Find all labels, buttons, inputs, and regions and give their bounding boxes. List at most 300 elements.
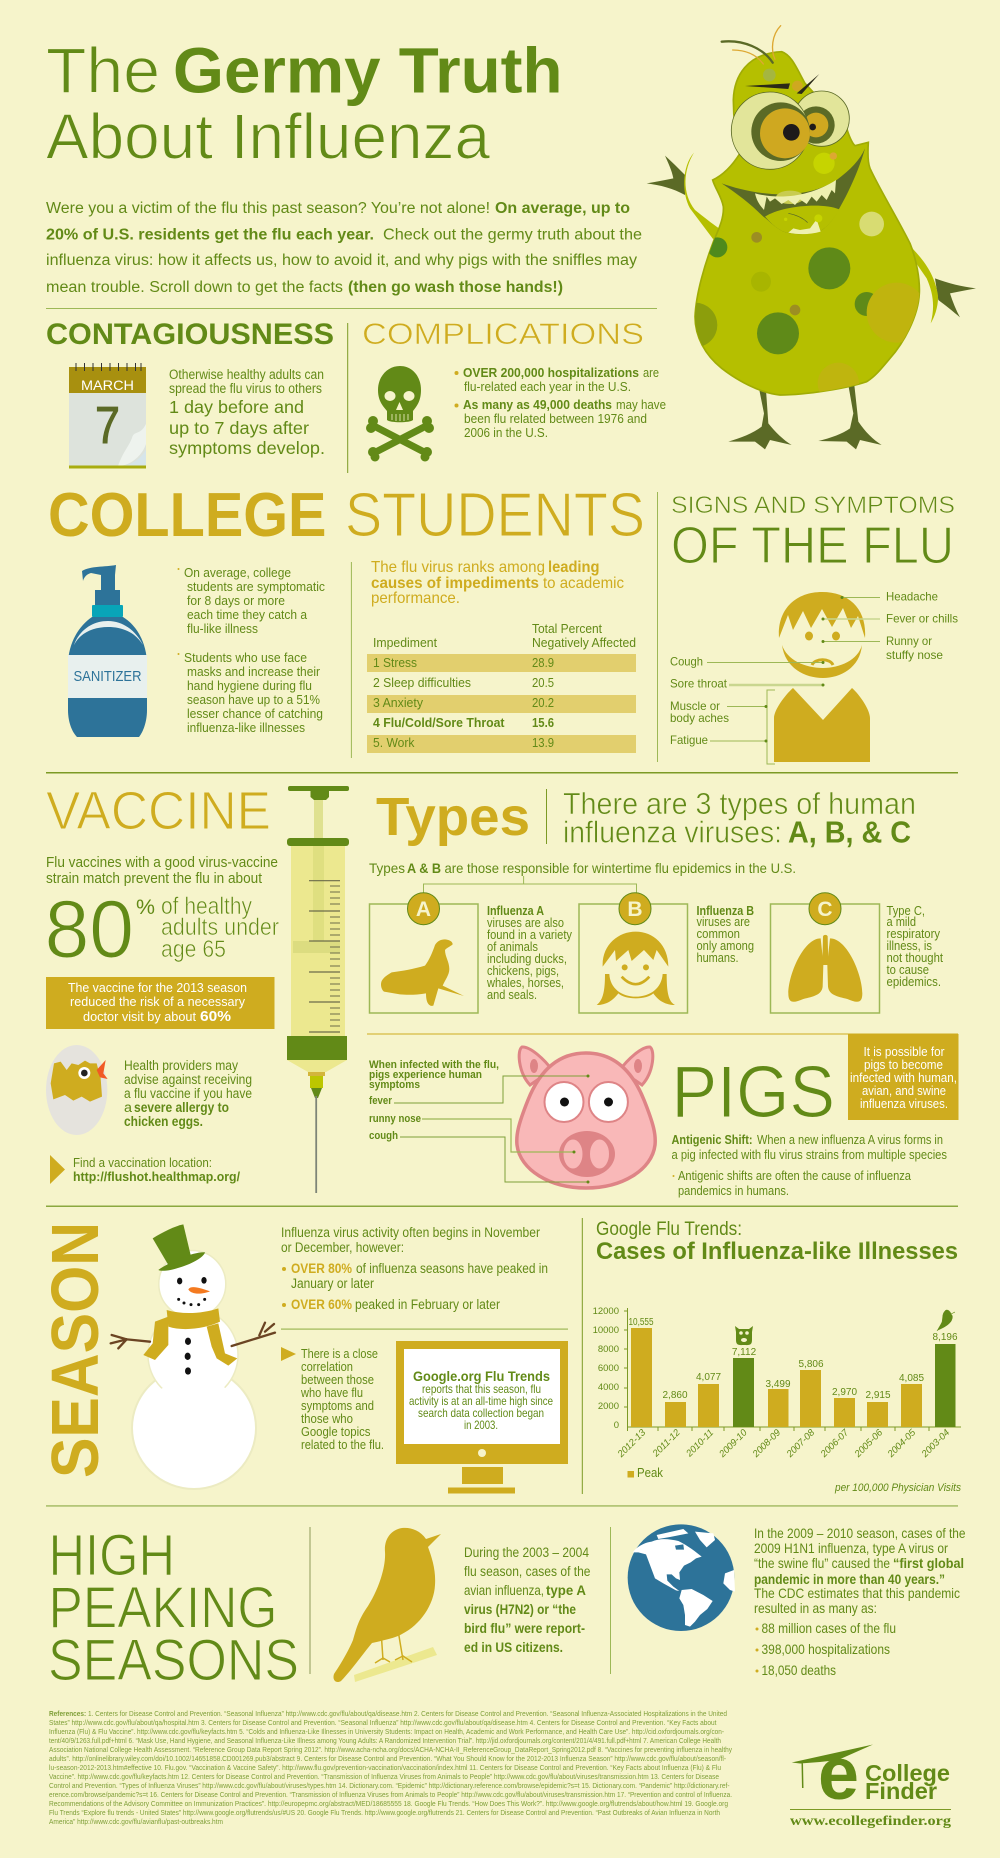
heading: three types of influenza: A, B, & C — [788, 815, 911, 850]
symptom labels: body aches — [670, 711, 729, 725]
text: leading causes of impediments: The flu virus ranks among — [371, 559, 545, 576]
references — [49, 1711, 732, 1826]
text: influenza season timing: January or later — [291, 1276, 374, 1291]
x axis labels: 2005-06 — [852, 1427, 886, 1460]
callout: pigs infection: It is possible for — [864, 1044, 945, 1059]
heading: complications: COMPLICATIONS — [362, 318, 644, 351]
badge c — [809, 893, 841, 925]
y axis labels: 2000 — [598, 1401, 619, 1412]
text: contagious period: Otherwise healthy adults can — [169, 367, 324, 382]
snowman scarf — [143, 1308, 237, 1366]
heading: three types of influenza — [563, 786, 916, 850]
text: egg allergy: a — [124, 1100, 133, 1115]
references: Recommendations of the Advisory Committee on Immunization Practices”. http://europepmc.org/abstract/MED/18685555 18. Google Flu Trends. “How Does This Work?”. http://www.google.org/flutrends/about/how.html 19. Google.org — [49, 1801, 728, 1808]
text: swine flu pandemic: 398,000 hospitalizations — [762, 1641, 890, 1657]
text: antigenic shift: a pig infected with flu virus strains from multiple species — [672, 1147, 947, 1162]
text: antigenic shift: When a new influenza A virus forms in — [757, 1132, 943, 1147]
text: college student facts: for 8 days or more — [187, 593, 285, 608]
table row highlights — [367, 654, 636, 753]
y axis labels: 12000 — [593, 1306, 619, 1317]
bar values: 3,499 — [765, 1379, 791, 1390]
bar values: 2,970 — [832, 1387, 857, 1398]
text: egg allergy: Health providers may — [124, 1058, 238, 1073]
badge b — [619, 893, 651, 925]
text: complications facts: been flu related between 1976 and — [464, 411, 647, 426]
snowman face — [177, 1277, 210, 1306]
text: influenza a: Influenza A — [487, 904, 544, 918]
text: types a and b: Types — [369, 860, 405, 876]
heading: signs and symptoms: SIGNS AND SYMPTOMS — [671, 492, 955, 519]
text: influenza a: found in a variety — [487, 928, 573, 942]
person body — [774, 688, 870, 762]
title: Germy Truth — [173, 35, 562, 107]
text: influenza a: of animals — [487, 940, 538, 954]
text: type c: respiratory — [886, 927, 941, 941]
heading: college students: COLLEGE — [48, 481, 326, 550]
text: type c: epidemics. — [886, 975, 941, 989]
monster spots — [695, 68, 920, 392]
text: complications facts: may have — [616, 397, 666, 412]
x axis labels: 2007-08 — [784, 1427, 818, 1460]
table: impediments: Total Percent — [532, 621, 602, 636]
text: college student facts: each time they catch a — [187, 607, 308, 622]
monster hair — [722, 26, 781, 64]
text: leading causes of impediments: leading — [548, 559, 600, 576]
text: swine flu pandemic: 88 million cases of the flu — [762, 1620, 896, 1636]
bar values: 7,112 — [732, 1347, 757, 1358]
heading: signs and symptoms — [671, 492, 955, 575]
heading: google flu trends: Google Flu Trends: — [596, 1219, 742, 1240]
text: bird flu season — [464, 1545, 590, 1655]
text: type c: to cause — [886, 963, 929, 977]
table: impediments: Impediment — [373, 635, 437, 650]
heading: google flu trends: Cases of Influenza-like Illnesses — [596, 1238, 958, 1265]
person hair — [779, 592, 865, 638]
icon: computer monitor with flu trends: search data collection began — [418, 1406, 544, 1420]
text: vaccine effectiveness: Flu vaccines with a good virus-vaccine — [46, 854, 278, 871]
pig symptoms labels — [369, 1059, 590, 1184]
x axis labels: 2012-13 — [615, 1427, 649, 1460]
monster legs — [728, 385, 882, 449]
text: antigenic shift: Antigenic Shift: — [672, 1132, 752, 1147]
callout: vaccine 60%: doctor visit by about — [83, 1009, 196, 1024]
title — [46, 35, 562, 173]
arrow and correlation text: those who — [301, 1411, 353, 1426]
bar chart: cases per season — [593, 1306, 961, 1494]
text: influenza a: whales, horses, — [486, 976, 564, 990]
text: bird flu season: flu season, cases of the — [464, 1564, 590, 1579]
bar values: 10,555 — [628, 1317, 654, 1328]
text: type c: a mild — [886, 915, 916, 929]
logo e letter: e — [818, 1732, 859, 1815]
text: college student facts: On average, college — [184, 565, 291, 580]
arrow and correlation text — [281, 1346, 384, 1452]
text: college student facts: lesser chance of catching — [187, 706, 323, 721]
table: impediments: 4 Flu/Cold/Sore Throat — [373, 715, 505, 730]
references: America” http://www.cdc.gov/flu/avianflu/past-outbreaks.htm — [49, 1819, 223, 1826]
heading: high peaking seasons — [48, 1523, 299, 1693]
table: impediments: Negatively Affected — [532, 635, 636, 650]
monster body — [695, 52, 919, 395]
text: vaccine effectiveness — [45, 854, 279, 975]
text: contagious period: 1 day before and — [169, 397, 304, 417]
icon: computer monitor with flu trends: activity is at an all-time high since — [409, 1394, 553, 1408]
title: The — [46, 35, 160, 107]
text: vaccine effectiveness: of healthy — [161, 893, 252, 920]
text: type c: Type C, — [886, 904, 925, 918]
text: vaccine effectiveness: % — [136, 896, 155, 919]
text: leading causes of impediments: causes of impediments — [371, 575, 539, 592]
references: Vaccine”. http://www.cdc.gov/flu/keyfacts.htm 12. Centers for Disease Control and Prevention. “Transmission of Influenza Viruses from Animals to People” http://www.cdc.gov/flu/about/viruses/transmission.htm 13. Centers for Disease — [49, 1774, 719, 1781]
symptom labels: Runny or — [886, 634, 932, 648]
text: types a and b: are those responsible for wintertime flu epidemics in the U.S. — [444, 860, 796, 876]
text: vaccine effectiveness: strain match prevent the flu in about — [46, 870, 263, 887]
x axis labels: 2009-10 — [716, 1427, 750, 1460]
text: egg allergy: advise against receiving — [124, 1072, 252, 1087]
references: erence.com/browse/pandemic?s=t 16. Centers for Disease Control and Prevention. “Transmission of Influenza Viruses from Animals to People” http://www.cdc.gov/flu/about/viruses/transmission.htm 17. “Prevention and control of Influenza. — [49, 1792, 732, 1799]
callout: vaccine 60%: The vaccine for the 2013 season — [68, 980, 247, 995]
pig symptoms labels: fever — [369, 1095, 393, 1107]
icon: calendar march 7: MARCH — [81, 377, 134, 393]
x axis labels: 2008-09 — [750, 1427, 784, 1460]
monster left arm and hand — [647, 153, 719, 239]
monster right eye — [794, 91, 849, 146]
text: influenza season timing: OVER 60% — [291, 1297, 352, 1312]
y axis labels: 4000 — [598, 1382, 619, 1393]
text: contagious period: up to 7 days after — [169, 418, 309, 438]
callout: pigs infection — [848, 1034, 958, 1120]
icon: pig face — [517, 1047, 655, 1188]
table: impediments: 20.5 — [532, 675, 554, 690]
text: influenza b: common — [696, 927, 740, 941]
references: References: 1. Centers for Disease Control and Prevention. “Seasonal Influenza” http://www.cdc.gov/flu/about/qa/disease.htm 2. Centers for Disease Control and Prevention. “Seasonal Influenza-Associated Hospitalizations in the United — [49, 1711, 727, 1718]
pig symptoms labels: When infected with the flu, — [369, 1059, 499, 1071]
text: contagious period: symptoms develop. — [169, 438, 325, 458]
text: bird flu season: ed in US citizens. — [464, 1640, 563, 1655]
text: influenza season timing: of influenza seasons have peaked in — [356, 1261, 548, 1276]
intro paragraph: Were you a victim of the flu this past season? You’re not alone! — [46, 200, 490, 217]
icon: globe — [628, 1524, 735, 1631]
heading: contagiousness: CONTAGIOUSNESS — [46, 318, 334, 351]
text: complications facts: are — [643, 365, 659, 380]
badge c: C — [817, 898, 833, 921]
text: influenza season timing: Influenza virus activity often begins in November — [281, 1225, 540, 1240]
text: swine flu pandemic: resulted in as many as: — [754, 1600, 877, 1616]
text: egg allergy: severe allergy to — [134, 1100, 229, 1115]
arrow and correlation text: There is a close — [301, 1346, 378, 1361]
monster eyebrows — [745, 74, 819, 94]
text: antigenic shift: pandemics in humans. — [678, 1183, 789, 1198]
heading: season: SEASON — [38, 1222, 113, 1478]
arrow and correlation text: symptoms and — [301, 1398, 374, 1413]
logo: ecollege finder — [790, 1732, 951, 1828]
text: influenza b: Influenza B — [696, 904, 754, 918]
x axis labels: 2004-05 — [885, 1427, 919, 1460]
intro paragraph: influenza virus: how it affects us, how to avoid it, and why pigs with the sniffles may — [46, 252, 637, 269]
text: type c: illness, is — [886, 939, 932, 953]
text: influenza a: chickens, pigs, — [487, 964, 559, 978]
logo graduation cap — [792, 1744, 873, 1788]
bar values: 8,196 — [932, 1332, 958, 1343]
heading: high peaking seasons: PEAKING — [48, 1576, 278, 1640]
text: influenza b: only among — [696, 939, 754, 953]
bar values — [628, 1317, 958, 1401]
text: college student facts: flu-like illness — [187, 621, 258, 636]
text: college student facts — [178, 565, 325, 735]
pig symptoms labels: pigs experience human — [369, 1069, 482, 1081]
icon: computer monitor with flu trends: in 2003. — [464, 1418, 498, 1432]
icon: small pig on chart — [735, 1326, 753, 1345]
text: influenza season timing: OVER 80% — [291, 1261, 352, 1276]
intro paragraph: (then go wash those hands!) — [348, 279, 563, 296]
y axis labels: 10000 — [593, 1325, 619, 1336]
text: swine flu pandemic — [754, 1525, 966, 1678]
text: complications facts: As many as 49,000 deaths — [463, 397, 612, 412]
text: complications facts — [454, 365, 666, 440]
text: college student facts: students are symptomatic — [187, 579, 325, 594]
icon: sanitizer bottle: SANITIZER — [74, 668, 142, 685]
icon: computer monitor with flu trends: Google.org Flu Trends — [413, 1368, 550, 1384]
badge a: A — [416, 898, 431, 921]
badge a — [408, 893, 440, 925]
text: vaccine effectiveness: adults under — [161, 914, 279, 941]
intro paragraph: Check out the germy truth about the — [383, 226, 642, 244]
pig symptoms labels: symptoms — [369, 1079, 420, 1091]
table: impediments: 13.9 — [532, 735, 554, 750]
legend: peak: Peak — [637, 1466, 664, 1480]
bar values: 4,085 — [899, 1373, 924, 1384]
heading: high peaking seasons: HIGH — [48, 1523, 175, 1588]
arrow and correlation text: related to the flu. — [301, 1437, 384, 1452]
text: swine flu pandemic: 18,050 deaths — [762, 1662, 836, 1678]
text: vaccine effectiveness: 80 — [45, 884, 134, 975]
table: impediments — [367, 621, 636, 753]
bar values: 2,915 — [865, 1390, 891, 1401]
pig symptoms labels: runny nose — [369, 1113, 421, 1125]
arrow and correlation text: between those — [301, 1372, 374, 1387]
symptom labels: Fever or chills — [886, 612, 958, 626]
y axis labels: 6000 — [598, 1363, 619, 1374]
symptom labels — [670, 590, 958, 747]
text: bird flu season: avian influenza, — [464, 1583, 544, 1598]
text: bird flu season: type A — [546, 1583, 586, 1598]
icon: small bird on chart — [937, 1310, 955, 1331]
text: bird flu season: virus (H7N2) or “the — [464, 1602, 576, 1617]
text: contagious period: spread the flu virus to others — [169, 381, 322, 396]
monster illustration — [647, 26, 976, 449]
monster left eye — [731, 92, 810, 169]
symptom leader lines — [707, 596, 880, 764]
text: antigenic shift: Antigenic shifts are often the cause of influenza — [678, 1168, 912, 1183]
arrow and vaccination link: Find a vaccination location: — [73, 1155, 212, 1170]
arrow and vaccination link — [50, 1155, 240, 1184]
icon: calendar march 7 — [69, 363, 146, 468]
monster mouth — [722, 148, 865, 234]
references: Association National College Health Assessment. “Reference Group Data Report Spring 2012”. http://www.acha-ncha.org/docs/ACHA-NCHA-II_ReferenceGroup_DataReport_Spring2012.pdf 8. “Vaccines for preventing influenza in healthy — [49, 1747, 732, 1754]
references: Flu Trends “Explore flu trends - United States” http://www.google.org/flutrends/us/#US 20. Google Flu Trends. http://www.google.org/flutrends 21. Centers for Disease Control and Prevention. “Past Outbreaks of Avian Influenza in North — [49, 1810, 720, 1817]
text: college student facts: season have up to a 51% — [187, 692, 320, 707]
text: swine flu pandemic: “the swine flu” caused the — [754, 1555, 890, 1571]
callout: pigs infection: influenza viruses. — [860, 1096, 948, 1111]
text: influenza season timing: peaked in February or later — [355, 1297, 500, 1312]
snowman details — [111, 1224, 275, 1375]
arrow and correlation text: Google topics — [301, 1424, 371, 1439]
symptom labels: Cough — [670, 655, 703, 669]
text: influenza a: including ducks, — [487, 952, 567, 966]
text: types a and b: A & B — [407, 860, 441, 876]
logo url: www.ecollegefinder.org — [790, 1813, 951, 1828]
intro paragraph: mean trouble. Scroll down to get the facts — [46, 279, 343, 296]
heading: signs and symptoms: OF THE FLU — [671, 517, 954, 575]
x axis labels: 2011-12 — [650, 1427, 683, 1460]
snowman arms — [111, 1323, 275, 1348]
icon: sanitizer bottle — [68, 565, 147, 737]
x axis labels: 2006-07 — [818, 1427, 852, 1460]
title: About Influenza — [46, 101, 490, 173]
text: college student facts: Students who use face — [184, 650, 307, 665]
x axis labels: 2010-11 — [683, 1427, 716, 1460]
intro paragraph: 20% of U.S. residents get the flu each year. — [46, 226, 374, 244]
icon: computer monitor with flu trends: reports that this season, flu — [422, 1382, 541, 1396]
logo wordmark: College — [865, 1760, 950, 1786]
bars — [631, 1328, 956, 1427]
icon: skull and crossbones — [366, 366, 434, 462]
icon: snowman — [111, 1224, 275, 1489]
text: swine flu pandemic: pandemic in more than 40 years.” — [754, 1571, 945, 1587]
text: bird flu season: During the 2003 – 2004 — [464, 1545, 589, 1560]
icon: syringe — [287, 786, 349, 1193]
icon: computer monitor with flu trends — [396, 1341, 568, 1494]
arrow and vaccination link: http://flushot.healthmap.org/ — [73, 1169, 240, 1184]
arrow and correlation text: correlation — [301, 1359, 353, 1374]
logo wordmark: Finder — [865, 1778, 937, 1804]
text: type c: not thought — [886, 951, 943, 965]
text: antigenic shift — [672, 1132, 947, 1198]
symptom labels: Sore throat — [670, 677, 728, 691]
text: influenza a: viruses are also — [487, 916, 564, 930]
text: leading causes of impediments: performance. — [371, 590, 460, 607]
symptom labels: Muscle or — [670, 699, 720, 713]
icon: person with symptoms — [670, 590, 958, 764]
table: impediments: 2 Sleep difficulties — [373, 675, 471, 690]
text: influenza a — [486, 904, 573, 1002]
callout: vaccine 60%: reduced the risk of a necessary — [70, 994, 245, 1009]
text: bird flu season: bird flu” were report- — [464, 1621, 585, 1636]
table: impediments: 1 Stress — [373, 655, 417, 670]
callout: pigs infection: avian, and swine — [862, 1083, 946, 1098]
y axis labels — [593, 1306, 619, 1431]
references: adults”. http://onlinelibrary.wiley.com/doi/10.1002/14651858.CD001269.pub3/abstract 9. Centers for Disease Control and Prevention. “What You Should Know for the 2012-2013 Influenza Season” http://www.cdc.gov/flu/about/season/fl- — [49, 1756, 727, 1763]
heading: three types of influenza: influenza viruses: — [563, 815, 782, 850]
badge b: B — [627, 898, 643, 921]
snowman buttons — [185, 1338, 191, 1375]
callout: vaccine 60% — [46, 977, 274, 1029]
text: egg allergy — [124, 1058, 252, 1129]
bar values: 4,077 — [696, 1372, 721, 1383]
heading: google flu trends — [596, 1219, 958, 1265]
symptom labels: Headache — [886, 590, 938, 604]
icon: seal — [381, 939, 464, 1006]
symptom labels: Fatigue — [670, 733, 708, 747]
text: influenza b: viruses are — [696, 915, 750, 929]
symptom labels: stuffy nose — [886, 648, 943, 662]
text: swine flu pandemic: 2009 H1N1 influenza, type A virus or — [754, 1540, 948, 1556]
text: influenza b — [696, 904, 754, 965]
monster right arm and hand — [909, 245, 976, 323]
callout: pigs infection: pigs to become — [864, 1057, 943, 1072]
x axis labels: 2003-04 — [919, 1427, 952, 1460]
text: college student facts: hand hygiene during flu — [187, 678, 312, 693]
icon: chick in egg — [46, 1045, 108, 1135]
heading: college students — [48, 481, 645, 550]
table: impediments: 5. Work — [373, 735, 415, 750]
table: impediments: 3 Anxiety — [373, 695, 423, 710]
text: influenza season timing — [281, 1225, 548, 1312]
panel: type a — [370, 893, 573, 1013]
callout: pigs infection: infected with human, — [850, 1070, 957, 1085]
references: tent/40/9/1263.full.pdf+html 6. “Mask Use, Hand Hygiene, and Seasonal Influenza-Like Illness among Young Adults: A Randomized Intervention Trial”. http://jid.oxfordjournals.org/content/201/4/491.full.pdf+html 7. American College Health — [49, 1738, 721, 1745]
pig symptoms labels: cough — [369, 1130, 398, 1142]
heading: types: Types — [376, 787, 530, 847]
heading: pigs: PIGS — [672, 1052, 835, 1133]
callout: vaccine 60%: 60% — [200, 1009, 231, 1025]
logo wordmark — [865, 1760, 950, 1804]
icon: girl face — [597, 932, 675, 1005]
text: college student facts: influenza-like illnesses — [187, 720, 305, 735]
arrow and correlation text: who have flu — [300, 1385, 363, 1400]
x axis labels — [615, 1427, 952, 1460]
chart axes — [624, 1308, 961, 1431]
text: influenza b: humans. — [696, 951, 738, 965]
bar values: 5,806 — [798, 1359, 824, 1370]
table: impediments: 20.2 — [532, 695, 554, 710]
icon: bird on branch — [333, 1528, 441, 1682]
text: swine flu pandemic: The CDC estimates that this pandemic — [754, 1585, 960, 1601]
intro paragraph — [46, 200, 642, 296]
references: Control and Prevention. “Types of Influenza Viruses” http://www.cdc.gov/flu/about/viruses/types.htm 14. Dictionary.com. “Epidemic” http://dictionary.reference.com/browse/epidemic?s=t 15. Dictionary.com. “Pandemic” http://dictionary.ref- — [49, 1783, 730, 1790]
references: States” http://www.cdc.gov/flu/about/qa/hospital.htm 3. Centers for Disease Control and Prevention. “Seasonal Influenza” http://www.cdc.gov/flu/about/qa/disease.htm 4. Centers for Disease Control and Prevention. “Key Facts about — [49, 1720, 717, 1727]
text: swine flu pandemic: In the 2009 – 2010 season, cases of the — [754, 1525, 966, 1541]
panel: type b — [579, 893, 754, 1013]
y axis labels: 0 — [614, 1420, 619, 1431]
text: complications facts: flu-related each year in the U.S. — [464, 379, 631, 394]
y axis labels: 8000 — [598, 1344, 619, 1355]
text: complications facts: OVER 200,000 hospitalizations — [463, 365, 639, 380]
icon: lungs — [788, 935, 862, 1002]
icon: calendar march 7: 7 — [95, 397, 120, 455]
chart note: per 100,000 Physician Visits — [834, 1482, 961, 1494]
text: egg allergy: chicken eggs. — [124, 1114, 203, 1129]
heading: high peaking seasons: SEASONS — [48, 1628, 299, 1693]
bar values: 2,860 — [662, 1390, 688, 1401]
references: lu-season-2012-2013.htm#effective 10. Flu.gov. “Vaccination & Vaccine Safety”. http://www.flu.gov/prevention-vaccination/vaccination/index.html 11. Centers for Disease Control and Prevention. “Key Facts about Influenza (Flu) & Flu — [49, 1765, 721, 1772]
heading: vaccine: VACCINE — [46, 781, 271, 841]
heading: three types of influenza: There are 3 types of human — [563, 786, 916, 821]
table: impediments: 28.9 — [532, 655, 554, 670]
heading: college students: STUDENTS — [345, 481, 645, 550]
intro paragraph: On average, up to — [495, 200, 630, 217]
panel: type c — [770, 893, 943, 1013]
text: vaccine effectiveness: age 65 — [161, 936, 226, 963]
text: swine flu pandemic: “first global — [893, 1555, 964, 1571]
text: egg allergy: a flu vaccine if you have — [124, 1086, 252, 1101]
person face — [782, 632, 862, 678]
snowman hat — [153, 1224, 205, 1271]
text: type c — [886, 904, 943, 989]
text: college student facts: masks and increase their — [187, 664, 321, 679]
references: Influenza (Flu) & Flu Vaccine”. http://www.cdc.gov/flu/keyfacts.htm 5. “Colds and Influenza-Like Illnesses in University Students: Impact on Health, Academic and Work Performance, and Health Care Use”. http://cid.oxfordjournals.org/con- — [49, 1729, 725, 1736]
text: leading causes of impediments — [371, 559, 624, 607]
